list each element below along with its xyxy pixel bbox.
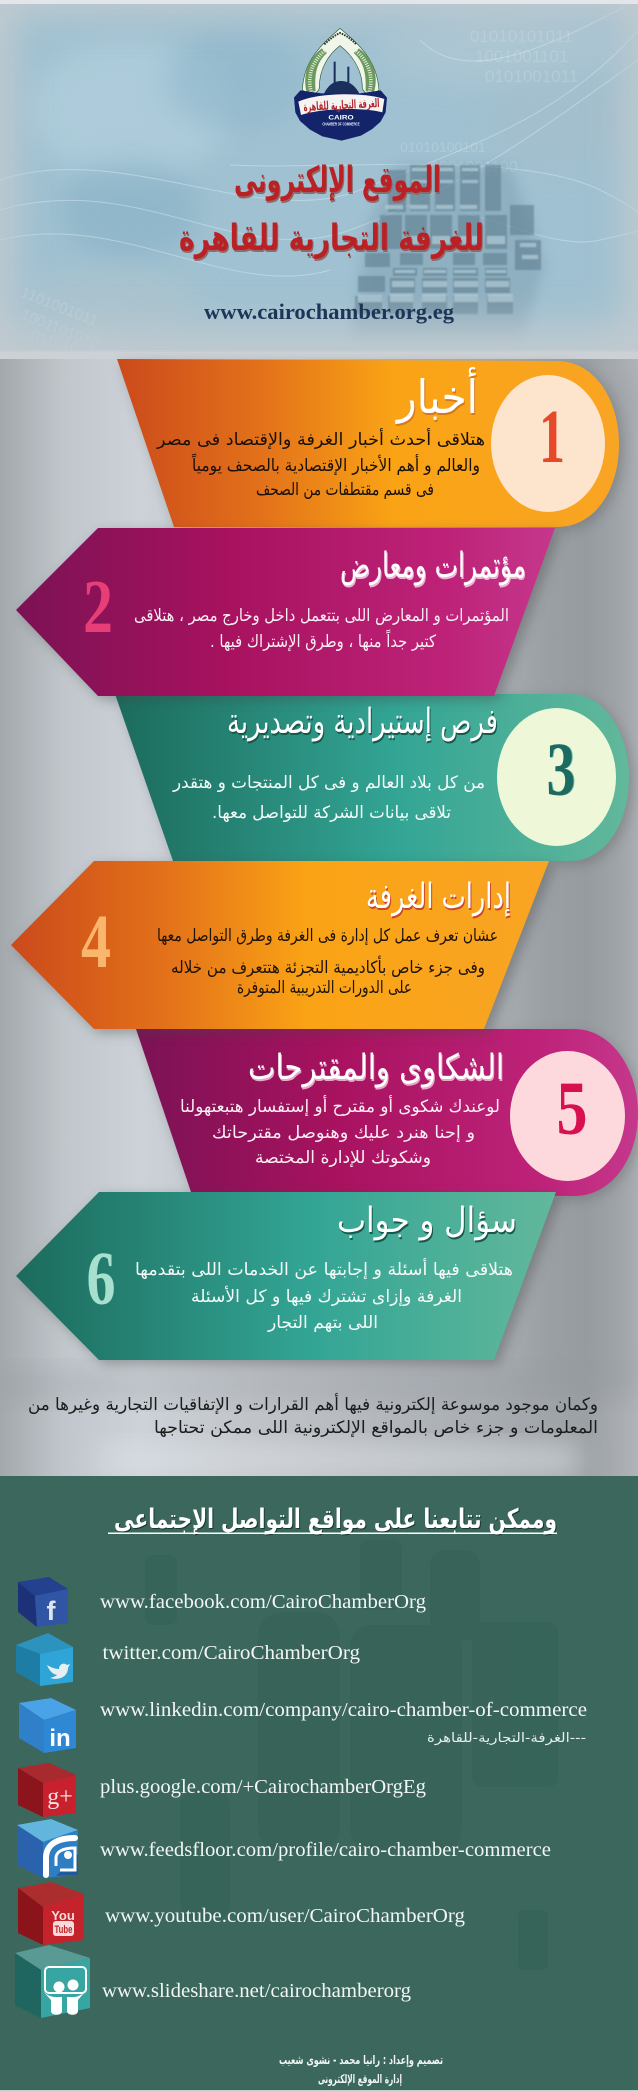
- logo banner: CAIRO: [328, 115, 354, 122]
- credits: [279, 2053, 443, 2087]
- closing paragraph: وكمان موجود موسوعة إلكترونية فيها أهم القرارات و الإتفاقيات التجارية وغيرها من: [28, 1393, 598, 1415]
- header photo background: globe, binary digits and keyboard: 1001001100: [430, 159, 518, 176]
- icon: youtube: Tube: [54, 1924, 72, 1936]
- number circle 3: [497, 708, 616, 846]
- text 5: وشكوتك للإدارة المختصة: [255, 1148, 431, 1168]
- logo: Cairo Chamber of Commerce: [294, 28, 387, 141]
- text 6: اللى بتهم التجار: [267, 1313, 378, 1333]
- number circle 5: 5: [556, 1067, 588, 1151]
- icon: feedsfloor: [17, 1819, 78, 1878]
- text 1: هتلاقى أحدث أخبار الغرفة والإقتصاد فى مصر: [156, 428, 485, 450]
- social media panel: [0, 1476, 638, 2091]
- panel 2: conferences and exhibitions: [16, 528, 560, 700]
- header photo background: globe, binary digits and keyboard: 01010100101: [400, 139, 486, 155]
- heading 5: الشكاوى والمقترحات: [248, 1048, 504, 1088]
- website url: www.cairochamber.org.eg: [204, 299, 454, 324]
- logo arch with wheat: [302, 28, 379, 94]
- text 1: [156, 428, 485, 500]
- header photo background: globe, binary digits and keyboard: 0110100110: [29, 328, 112, 366]
- heading 6: سؤال و جواب: [337, 1201, 517, 1241]
- text 2: المؤتمرات و المعارض اللى بتتعمل داخل وخارج مصر ، هتلاقى: [134, 606, 509, 626]
- icon: youtube: [18, 1882, 84, 1945]
- text 2: [134, 606, 509, 652]
- icon: youtube: You: [51, 1908, 75, 1923]
- text 5: و إحنا هنرد عليك وهنوصل مقترحاتك: [212, 1123, 475, 1143]
- text 3: [172, 773, 485, 823]
- text 4: [157, 926, 498, 998]
- number circle 5: [510, 1051, 625, 1181]
- logo mosque silhouette: [323, 62, 360, 95]
- text 3: من كل بلاد العالم و فى كل المنتجات و هتقدر: [172, 773, 485, 793]
- credits: إدارة الموقع الإلكترونى: [318, 2072, 402, 2087]
- page background: [0, 340, 638, 1480]
- icon: facebook: f: [46, 1596, 56, 1626]
- link: youtube: www.youtube.com/user/CairoChamberOrg: [105, 1905, 465, 1927]
- link: google plus: plus.google.com/+CairochamberOrgEg: [100, 1776, 426, 1798]
- heading 2: مؤتمرات ومعارض: [340, 546, 526, 586]
- heading 3: فرص إستيرادية وتصديرية: [227, 702, 498, 742]
- credits: تصميم وإعداد : رانيا محمد - نشوى شعيب: [279, 2053, 443, 2068]
- link: linkedin: www.linkedin.com/company/cairo-chamber-of-commerce: [100, 1699, 587, 1721]
- link: feedsfloor: www.feedsfloor.com/profile/cairo-chamber-commerce: [100, 1839, 551, 1861]
- title: [179, 160, 484, 259]
- icon: twitter: [16, 1633, 73, 1686]
- icon: linkedin: in: [49, 1725, 71, 1752]
- number circle 1: [491, 375, 605, 512]
- logo banner: CHAMBER OF COMMERCE: [322, 122, 360, 128]
- panel 6: questions and answers: [16, 1192, 561, 1364]
- header photo background: globe, binary digits and keyboard: [0, 0, 638, 366]
- closing paragraph: المعلومات و جزء خاص بالمواقع الإلكترونية اللى ممكن تحتاجها: [154, 1418, 598, 1438]
- number 4: 4: [81, 900, 111, 984]
- text 6: الغرفة وإزاى تشترك فيها و كل الأسئلة: [191, 1286, 462, 1307]
- panel 4: chamber departments: [11, 861, 554, 1033]
- number circle 3: 3: [546, 728, 576, 812]
- icon: google plus: g+: [47, 1784, 73, 1810]
- keyboard keys: [355, 165, 541, 314]
- icon: facebook: [18, 1577, 68, 1627]
- header photo background: globe, binary digits and keyboard: 1001101010: [19, 306, 101, 353]
- text 6: [135, 1258, 513, 1333]
- heading 4: إدارات الغرفة: [366, 877, 511, 917]
- text 4: عشان تعرف عمل كل إدارة فى الغرفة وطرق التواصل معها: [157, 926, 498, 946]
- logo banner: [298, 94, 384, 128]
- panel watermark icons: [145, 1540, 558, 1970]
- text 2: كتير جداً منها ، وطرق الإشتراك فيها .: [210, 628, 437, 652]
- text 4: وفى جزء خاص بأكاديمية التجزئة هتتعرف من خلاله: [171, 955, 485, 978]
- header photo background: globe, binary digits and keyboard: 1101001011: [19, 284, 100, 330]
- title: الموقع الإلكترونى: [234, 160, 441, 201]
- icon: linkedin: [19, 1698, 76, 1753]
- text 3: تلاقى بيانات الشركة للتواصل معها.: [212, 803, 451, 823]
- panel 3: import and export: [115, 694, 633, 865]
- header photo background: globe, binary digits and keyboard: 1001001101: [475, 47, 568, 66]
- text 1: فى قسم مقتطفات من الصحف: [256, 480, 434, 500]
- text 1: والعالم و أهم الأخبار الإقتصادية بالصحف يومياً: [191, 452, 480, 476]
- header photo background: globe, binary digits and keyboard: 01010101011: [470, 27, 573, 46]
- text 4: على الدورات التدريبية المتوفرة: [237, 978, 412, 998]
- link: linkedin arabic slug: ---الغرفة-التجارية-للقاهرة: [427, 1731, 586, 1746]
- title: للغرفة التجارية للقاهرة: [179, 218, 484, 259]
- closing paragraph: [28, 1393, 598, 1438]
- link: facebook: www.facebook.com/CairoChamberOrg: [100, 1591, 426, 1613]
- number 2: 2: [83, 565, 113, 649]
- panel 5: complaints and suggestions: [136, 1029, 638, 1200]
- panel 1: news: [117, 359, 623, 531]
- header photo background: globe, binary digits and keyboard: 0101001011: [485, 67, 578, 86]
- icon: slideshare: [15, 1945, 90, 2018]
- link: slideshare: www.slideshare.net/cairochamberorg: [102, 1980, 411, 2002]
- logo banner: الغرفة التجارية للقاهرة: [303, 96, 380, 114]
- text 6: هتلاقى فيها أسئلة و إجابتها عن الخدمات اللى بتقدمها: [135, 1258, 513, 1280]
- number 6: 6: [86, 1237, 116, 1321]
- text 5: [180, 1095, 500, 1168]
- logo gear: [294, 90, 387, 141]
- text 5: لوعندك شكوى أو مقترح أو إستفسار هتبعتهولنا: [180, 1095, 500, 1117]
- link: twitter: twitter.com/CairoChamberOrg: [102, 1642, 360, 1664]
- header vignette: [0, 0, 638, 350]
- heading 1: أخبار: [395, 367, 478, 424]
- number circle 1: 1: [539, 395, 565, 479]
- icon: google plus: [18, 1763, 76, 1817]
